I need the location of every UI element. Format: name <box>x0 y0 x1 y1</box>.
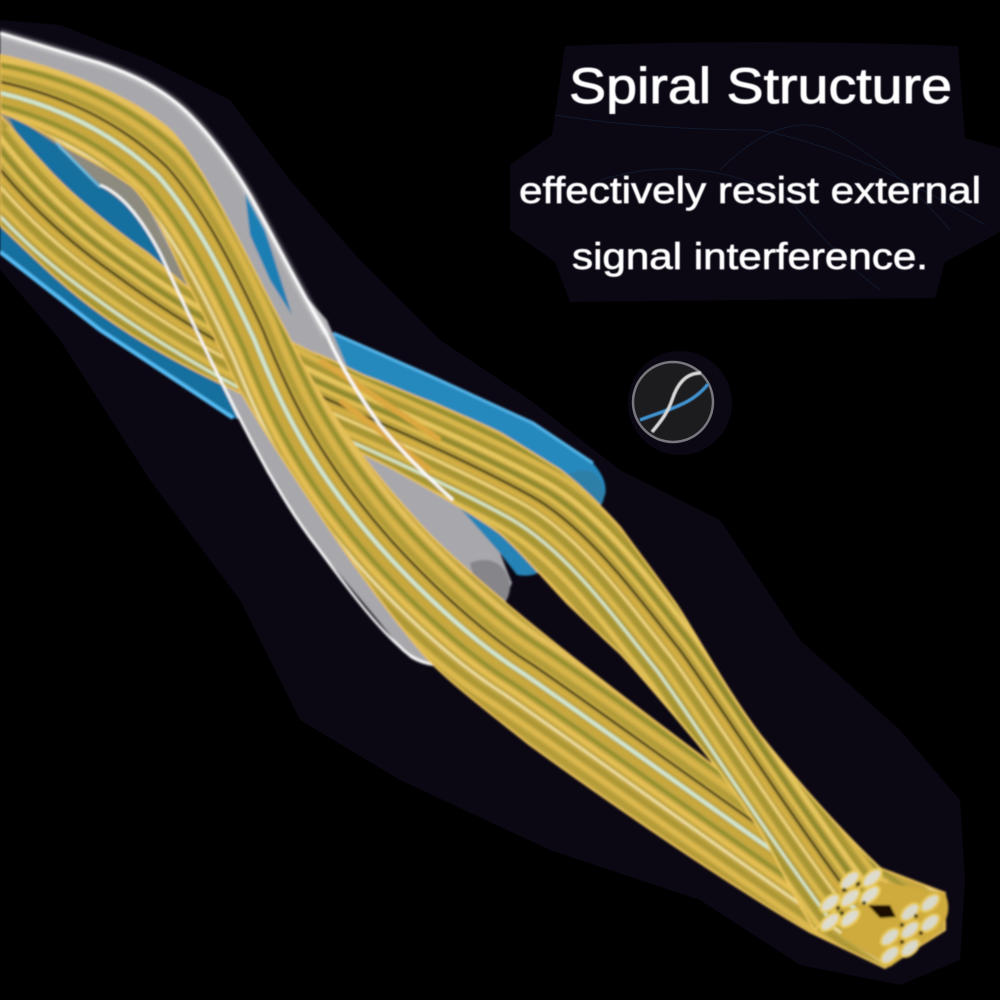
gold bundle rear end section <box>601 602 880 931</box>
description line 1: effectively resist external <box>519 170 981 211</box>
icon blue wire <box>640 384 708 420</box>
small blue sliver in gray tube <box>380 590 413 628</box>
blue thin line <box>5 63 100 187</box>
network texture behind text <box>555 115 985 290</box>
right wire cluster <box>840 880 948 967</box>
icon white wire <box>652 373 701 432</box>
gray sheath end caps <box>470 560 510 603</box>
gold bundle rear outline <box>0 115 880 930</box>
title: Spiral Structure <box>569 58 952 114</box>
text background halo <box>510 42 1000 302</box>
gray sheath white edges <box>0 33 453 666</box>
twisted strands at crossing <box>320 360 440 470</box>
description line 2: signal interference. <box>572 236 928 277</box>
icon: twisted pair badge <box>628 351 732 455</box>
blue sheath: lower tube end <box>450 500 545 576</box>
blue sheath: right wedge <box>245 193 292 315</box>
left wire cluster <box>817 866 885 934</box>
icon ring <box>633 362 713 442</box>
blue sheath end cap <box>563 470 604 520</box>
gold bundle rear <box>0 118 673 634</box>
blue sheath: upper left wedge <box>5 110 175 290</box>
icon halo <box>628 351 732 455</box>
blue highlight lower left <box>0 252 233 418</box>
gray sheath <box>0 33 512 666</box>
description text <box>519 170 981 277</box>
blue highlight upper right <box>333 333 593 463</box>
gray-tan shadow area left of arc <box>0 105 187 313</box>
blue sheath: upper right <box>320 333 606 530</box>
blue sheath: lower left <box>0 222 300 430</box>
